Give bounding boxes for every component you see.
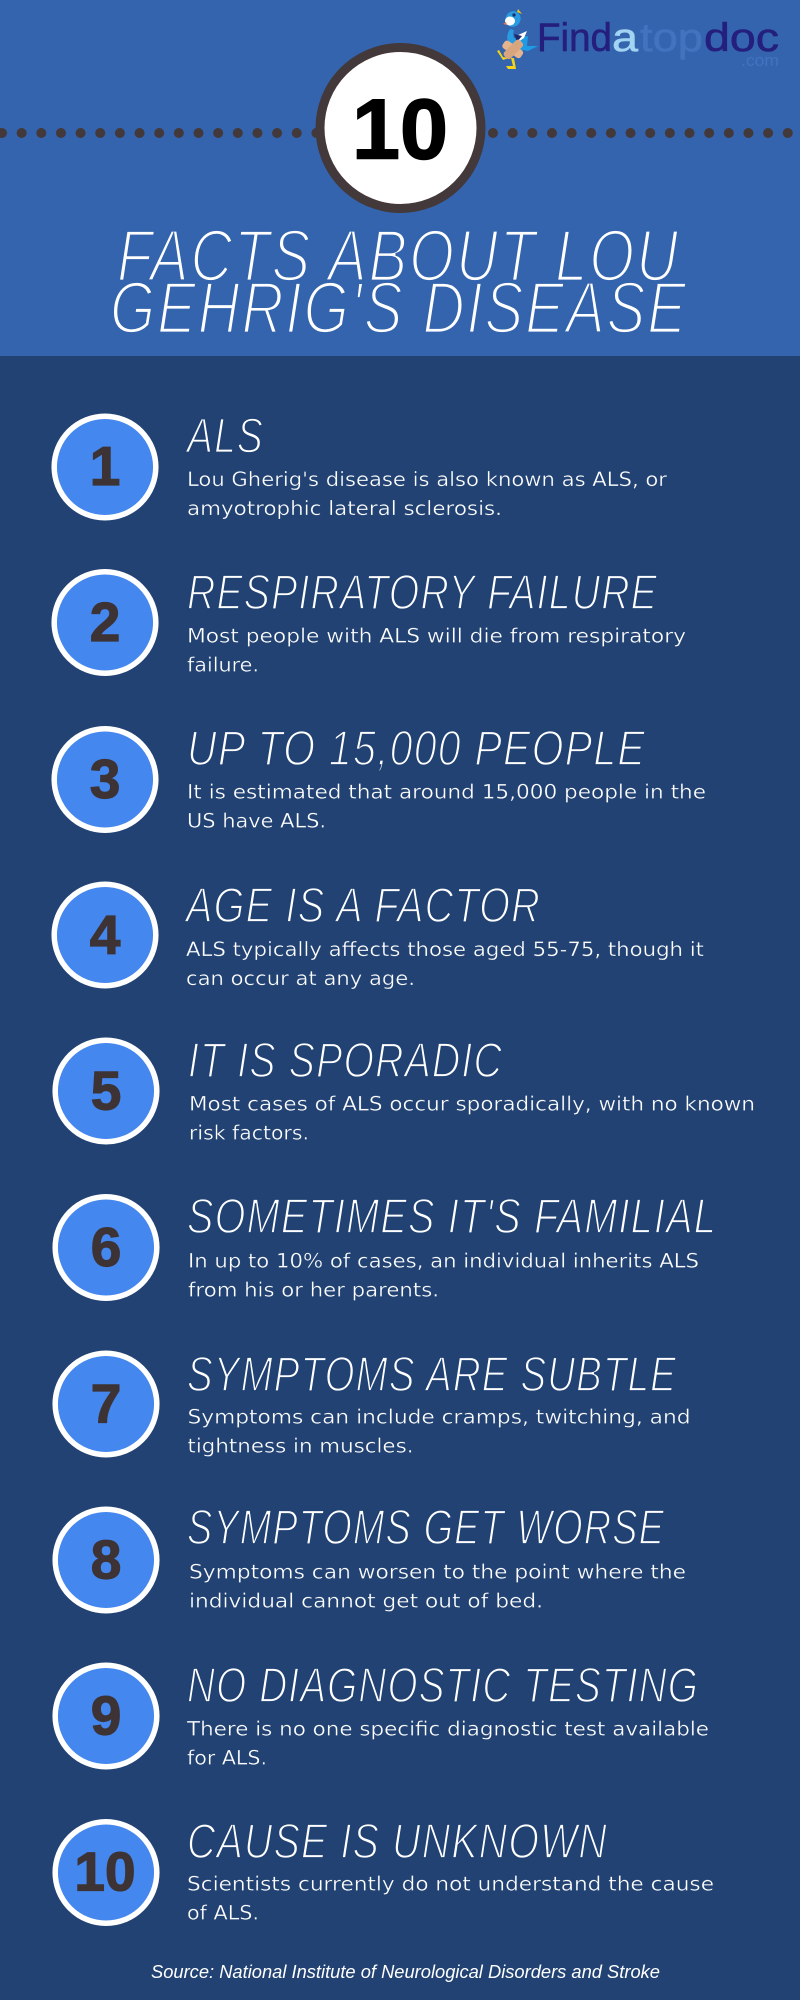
- fact 9: [55, 1659, 709, 1769]
- number badge 5: 5: [91, 1060, 121, 1122]
- number badge 6: [55, 1197, 157, 1298]
- number badge 2: 2: [90, 591, 120, 653]
- logo wordmark: a: [612, 16, 639, 60]
- number badge 9: 9: [91, 1684, 121, 1746]
- fact 5: [55, 1034, 755, 1144]
- description 7: tightness in muscles.: [188, 1434, 414, 1457]
- number badge 8: 8: [91, 1528, 121, 1590]
- description 6: from his or her parents.: [188, 1278, 439, 1301]
- dotted line: left: [2, 128, 318, 138]
- description 10: Scientists currently do not understand the cause: [187, 1872, 714, 1895]
- description 4: ALS typically affects those aged 55-75, though it: [186, 938, 704, 961]
- fact 1: [54, 410, 668, 520]
- number badge 1: 1: [90, 435, 120, 497]
- description 8: [189, 1560, 686, 1612]
- heading 3: UP TO 15,000 PEOPLE: [187, 722, 646, 776]
- description 7: [188, 1405, 690, 1457]
- badge: big number 10: 10: [352, 82, 448, 178]
- description 3: US have ALS.: [187, 809, 326, 832]
- number badge 9: [55, 1665, 157, 1767]
- number badge 6: 6: [91, 1216, 121, 1278]
- panel: header background: [0, 0, 800, 356]
- description 5: risk factors.: [189, 1121, 309, 1144]
- title: [110, 216, 688, 349]
- description 4: can occur at any age.: [186, 967, 415, 990]
- number badge 8: [55, 1509, 157, 1611]
- heading 8: SYMPTOMS GET WORSE: [187, 1501, 665, 1555]
- description 4: [186, 938, 704, 990]
- dotted line: right: [493, 128, 790, 138]
- number badge 3: 3: [90, 748, 120, 810]
- heading 7: SYMPTOMS ARE SUBTLE: [187, 1348, 677, 1402]
- description 9: for ALS.: [187, 1746, 267, 1769]
- number badge 5: [55, 1040, 157, 1142]
- fact 10: [55, 1815, 714, 1924]
- description 9: [186, 1717, 709, 1769]
- number badge 7: [55, 1353, 157, 1455]
- fact 3: [54, 722, 706, 832]
- description 1: amyotrophic lateral sclerosis.: [187, 497, 502, 520]
- number badge 3: [54, 729, 156, 830]
- description 5: [189, 1092, 755, 1144]
- description 10: [187, 1872, 714, 1924]
- description 6: [188, 1249, 699, 1301]
- description 5: Most cases of ALS occur sporadically, with no known: [189, 1092, 755, 1115]
- number badge 4: [54, 884, 156, 986]
- description 1: [187, 468, 668, 520]
- description 6: In up to 10% of cases, an individual inherits ALS: [188, 1249, 699, 1272]
- heading 1: ALS: [185, 410, 264, 464]
- description 8: Symptoms can worsen to the point where the: [189, 1560, 686, 1583]
- fact 7: [55, 1348, 690, 1457]
- source note: Source: National Institute of Neurological Disorders and Stroke: [151, 1961, 660, 1982]
- number badge 2: [54, 572, 156, 673]
- heading 10: CAUSE IS UNKNOWN: [187, 1815, 608, 1869]
- description 9: There is no one specific diagnostic test available: [186, 1717, 709, 1740]
- description 2: failure.: [187, 653, 259, 676]
- heading 5: IT IS SPORADIC: [188, 1034, 503, 1088]
- logo wordmark: Find: [537, 16, 612, 60]
- fact 2: [54, 566, 686, 676]
- logo wordmark: doc: [704, 16, 779, 60]
- icon: bird mascot: [497, 8, 538, 69]
- logo wordmark: .com: [741, 51, 779, 70]
- heading 4: AGE IS A FACTOR: [184, 879, 541, 933]
- number badge 4: 4: [90, 904, 121, 966]
- fact 8: [55, 1501, 686, 1612]
- description 8: individual cannot get out of bed.: [189, 1589, 543, 1612]
- description 1: Lou Gherig's disease is also known as ALS, or: [187, 468, 668, 491]
- logo wordmark: top: [640, 16, 703, 60]
- description 3: [187, 780, 706, 832]
- logo: Findatopdoc: [497, 8, 779, 70]
- number badge 10: [55, 1822, 157, 1923]
- heading 2: RESPIRATORY FAILURE: [187, 566, 658, 620]
- description 2: Most people with ALS will die from respiratory: [187, 624, 686, 647]
- fact 6: [55, 1190, 717, 1301]
- number badge 1: [54, 416, 156, 518]
- description 2: [187, 624, 686, 676]
- description 7: Symptoms can include cramps, twitching, and: [188, 1405, 690, 1428]
- description 3: It is estimated that around 15,000 people in the: [187, 780, 706, 803]
- number badge 10: 10: [74, 1840, 136, 1902]
- logo wordmark: [537, 16, 779, 70]
- description 10: of ALS.: [187, 1901, 259, 1924]
- fact 4: [54, 879, 704, 990]
- number badge 7: 7: [91, 1372, 121, 1434]
- badge: big number 10: [320, 48, 481, 208]
